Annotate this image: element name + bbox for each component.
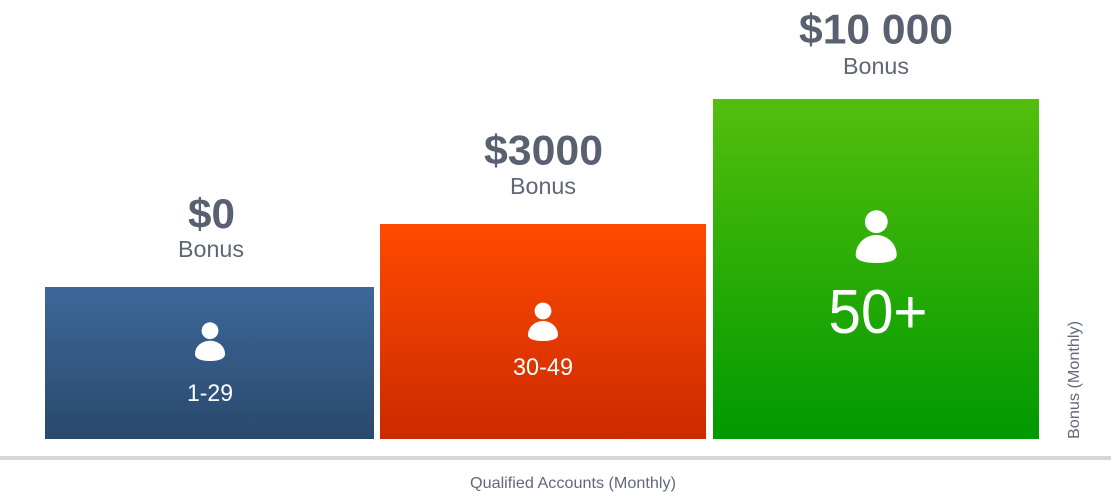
x axis line <box>0 456 1111 460</box>
account range: 50+ <box>828 278 928 347</box>
bonus label: Bonus <box>178 236 244 262</box>
icon: person <box>856 210 897 263</box>
bar: green <box>713 99 1039 439</box>
icon: person <box>528 303 558 341</box>
tier: 50+ accounts <box>713 6 1039 439</box>
account range: 1-29 <box>187 380 233 407</box>
tier: 30-49 accounts <box>380 126 706 439</box>
bonus amount: $3000: $3000 <box>484 126 603 174</box>
y axis label: Bonus (Monthly) <box>1066 321 1083 439</box>
bonus label: Bonus <box>510 173 576 199</box>
bar: orange <box>380 224 706 439</box>
icon: person <box>195 322 225 361</box>
bonus label: Bonus <box>843 53 909 79</box>
tier: 1-29 accounts <box>45 190 374 439</box>
account range: 30-49 <box>513 354 573 381</box>
bonus amount: $10 000: $10 000 <box>799 6 953 52</box>
x axis label: Qualified Accounts (Monthly) <box>470 475 676 492</box>
bar: blue <box>45 287 374 439</box>
bonus amount: $0: $0 <box>188 190 235 237</box>
